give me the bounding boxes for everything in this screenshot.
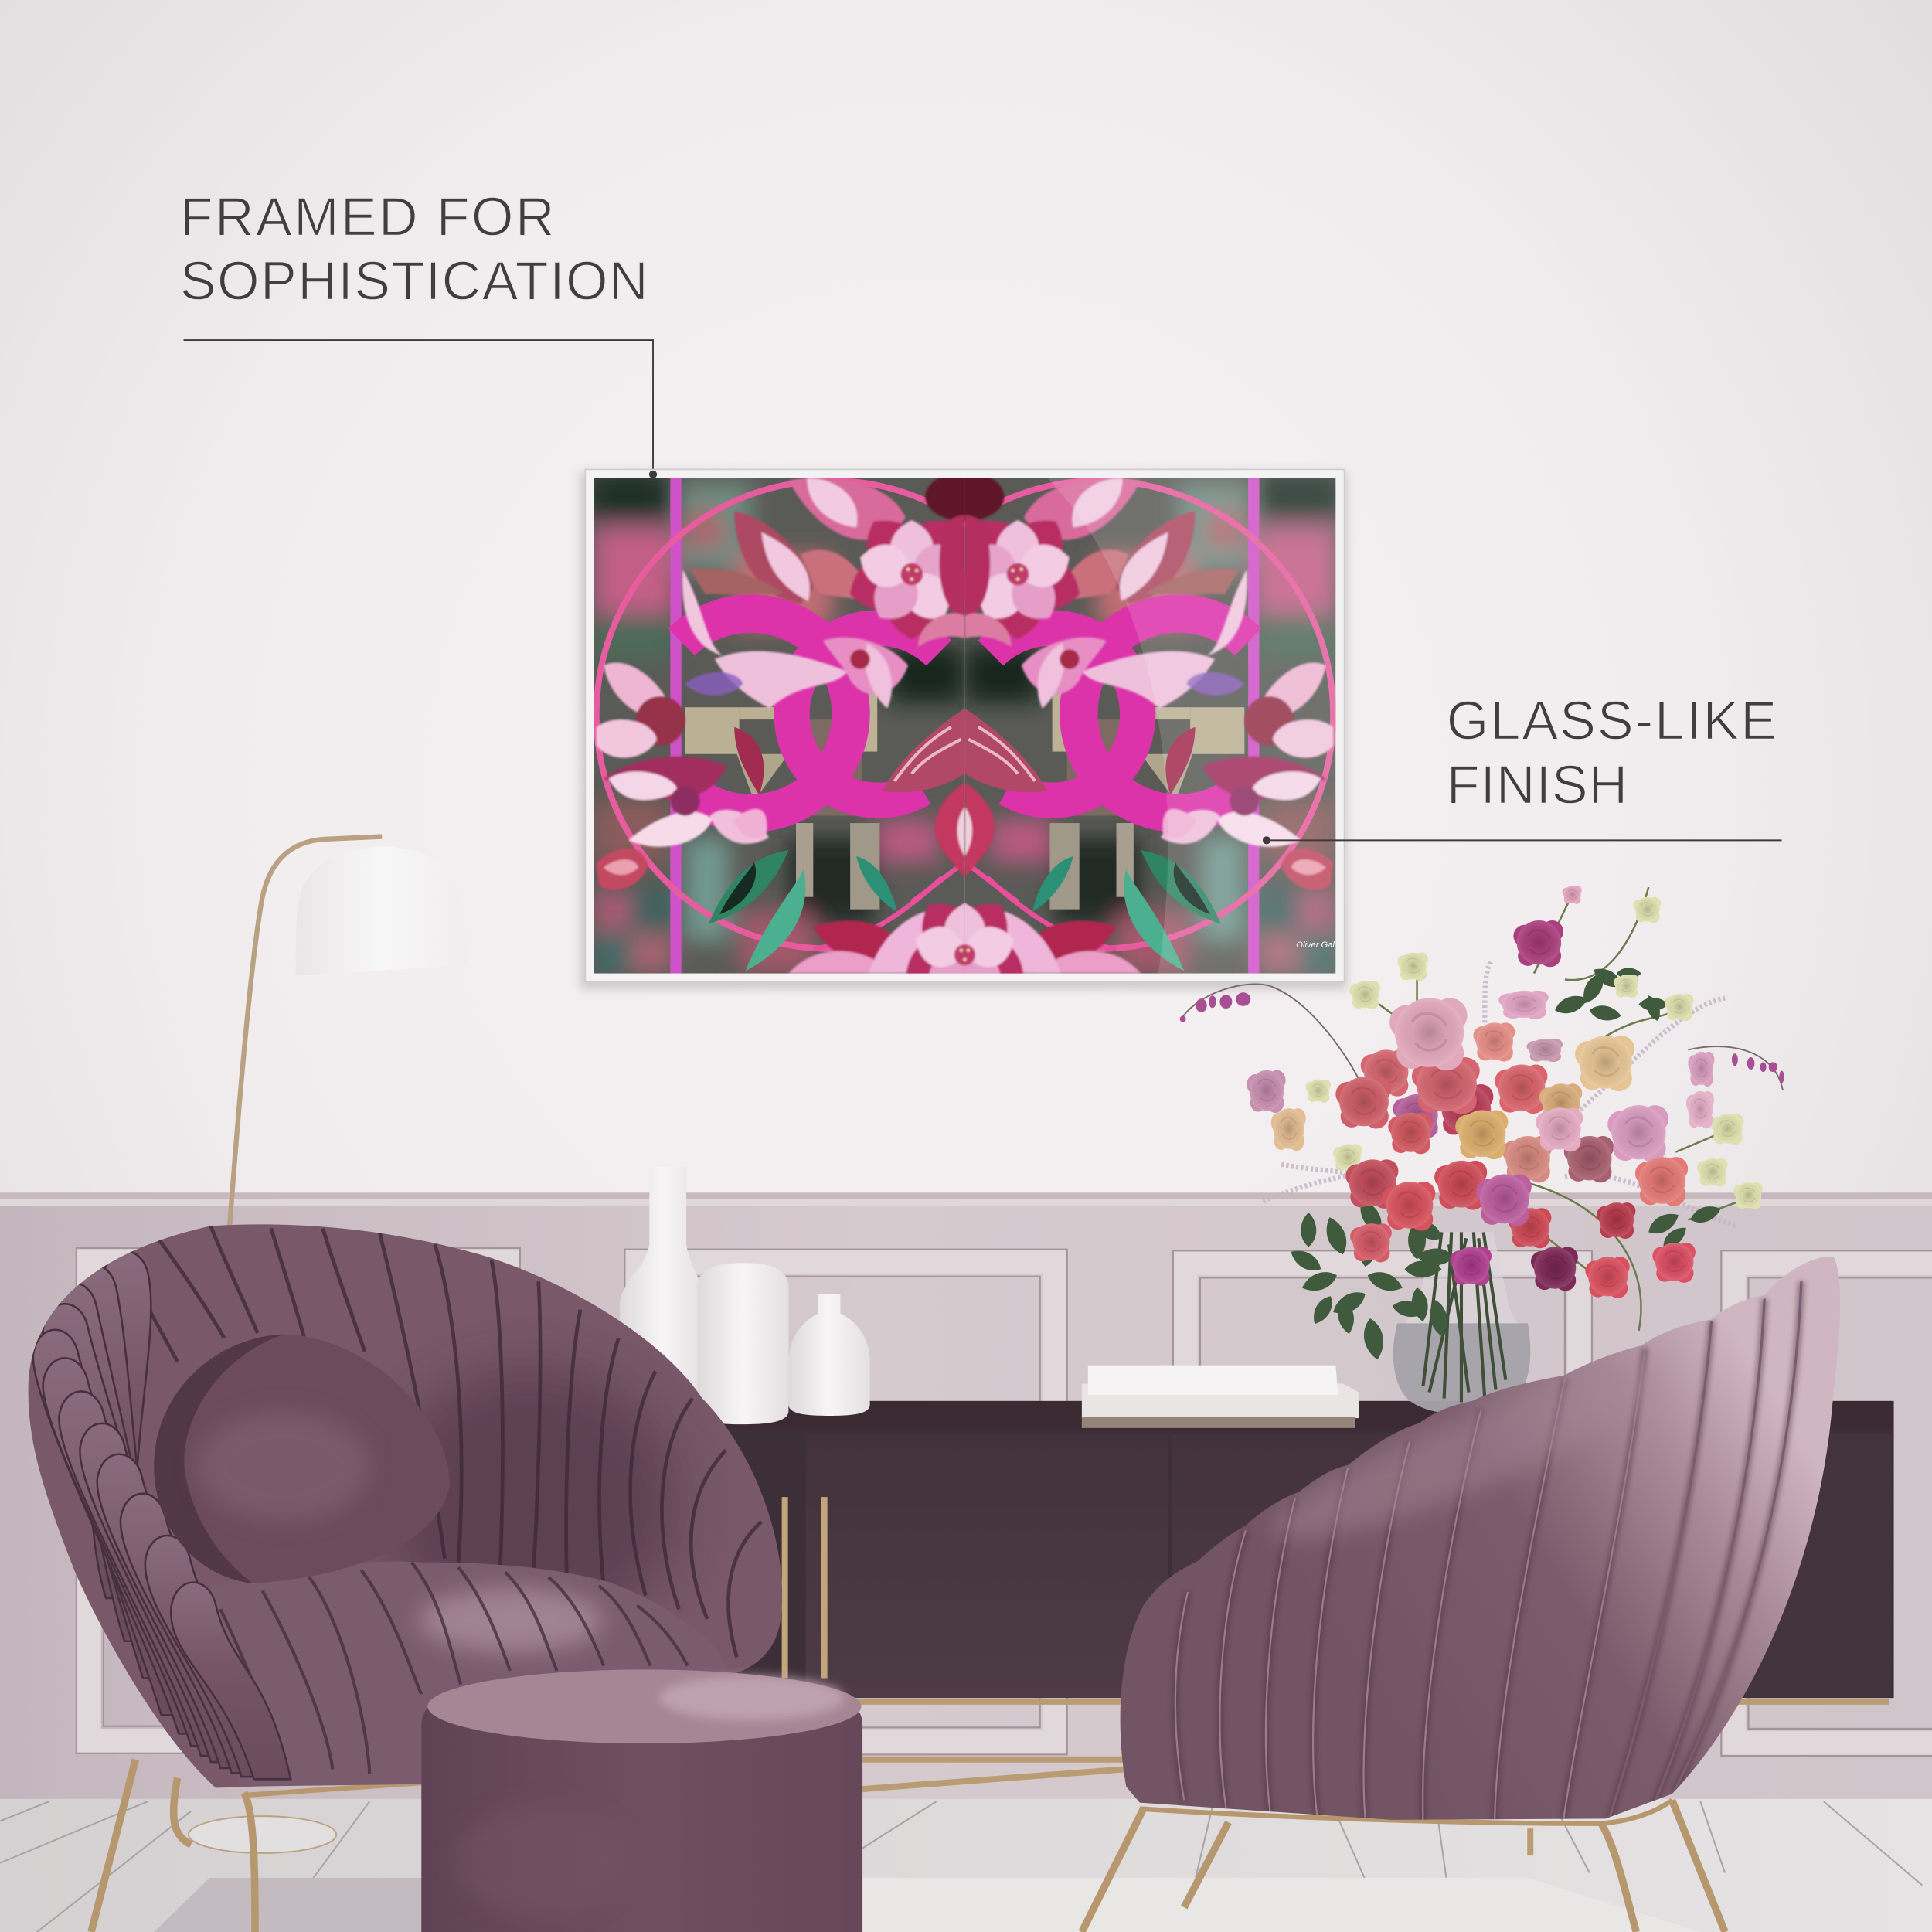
lamp shade <box>296 846 468 976</box>
artwork mirrored right half <box>865 472 1341 1017</box>
sunlight on seat <box>419 1588 604 1652</box>
cream panels <box>685 707 740 754</box>
round ottoman <box>421 1669 862 1932</box>
leader line <box>1267 839 1781 841</box>
petals and blossoms <box>597 472 1031 1017</box>
heading second line: FINISH <box>1447 754 1628 815</box>
lamp base <box>189 1816 336 1853</box>
green leaves <box>709 850 788 924</box>
framed artwork <box>585 469 1344 1017</box>
purple vertical strip <box>670 478 682 974</box>
right armchair <box>1082 1257 1840 1932</box>
artwork left half <box>589 472 1065 1017</box>
center bottom blossom <box>813 920 900 961</box>
annotation: glass-like finish <box>1267 690 1781 840</box>
tall vase <box>620 1167 705 1393</box>
door panels <box>806 1433 1168 1698</box>
floor lamp <box>189 837 468 1853</box>
round pillow <box>154 1335 450 1583</box>
wainscot wall panelling <box>0 1192 1932 1809</box>
small vase <box>788 1294 870 1416</box>
left armchair <box>29 1224 782 1932</box>
pink CC emblem <box>682 614 939 813</box>
annotation: framed for sophistication <box>180 186 653 474</box>
gold base rail <box>788 1702 1889 1855</box>
heading second line: SOPHISTICATION <box>180 250 648 311</box>
left chair back channels <box>117 1226 761 1657</box>
center crimson bud <box>935 782 964 877</box>
central feather leaf <box>883 709 964 792</box>
right chair shell <box>1121 1257 1840 1820</box>
stems <box>1366 887 1750 1331</box>
glass reflection <box>1047 478 1335 974</box>
left arm nested channels <box>33 1251 291 1779</box>
rug <box>154 1878 1700 1932</box>
wall background <box>0 0 1932 1207</box>
roses and peonies <box>1247 886 1715 1298</box>
lamp stem <box>230 837 382 1232</box>
gold handles <box>785 1497 825 1679</box>
seat channels <box>220 1563 688 1774</box>
flower bouquet <box>1180 886 1784 1414</box>
bleeding heart sprays <box>1183 984 1783 1090</box>
heading: GLASS-LIKE <box>1447 690 1777 751</box>
large pink rings <box>597 481 1065 949</box>
right chair channels <box>1175 1281 1801 1822</box>
glass vase <box>1393 1232 1530 1414</box>
cylinder vase <box>697 1263 788 1424</box>
left chair legs <box>91 1760 421 1932</box>
stacked books <box>1082 1366 1359 1428</box>
frame shadow <box>580 472 1347 989</box>
green leaves <box>1287 964 1723 1361</box>
floor <box>0 1799 1932 1932</box>
left chair shell <box>29 1224 782 1787</box>
heading: FRAMED FOR <box>180 186 554 247</box>
leader line <box>184 340 653 474</box>
left chair seat cushion <box>203 1562 727 1787</box>
sideboard <box>721 1401 1894 1855</box>
right chair legs <box>1082 1800 1725 1932</box>
artist signature: Oliver Gal <box>1296 940 1335 950</box>
white vases <box>620 1167 870 1424</box>
petals over emblem <box>715 651 848 709</box>
wispy sprays <box>1263 961 1737 1226</box>
leader dots <box>649 471 1270 844</box>
frame <box>585 469 1344 982</box>
pale yellow blossoms <box>1305 897 1763 1209</box>
